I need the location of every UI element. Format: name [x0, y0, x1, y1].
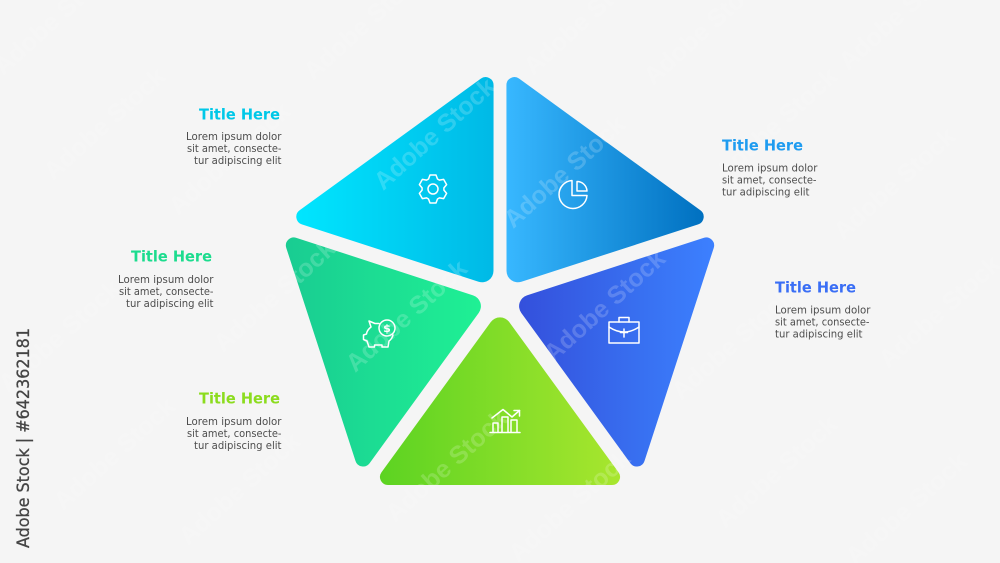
text block: royal blue: sit amet, consecte- — [775, 316, 870, 328]
stock watermarks: Adobe Stock — [164, 97, 296, 221]
segment: blue triangle — [414, 74, 707, 351]
stock watermarks: Adobe Stock — [341, 254, 473, 378]
icon: pie chart — [559, 180, 587, 208]
text block: royal blue: Lorem ipsum dolor — [775, 304, 871, 316]
text block: royal blue: tur adipiscing elit — [775, 328, 862, 340]
stock watermarks: Adobe Stock — [174, 427, 306, 551]
text block: cyan: Lorem ipsum dolor — [186, 131, 282, 143]
stock watermarks: Adobe Stock — [711, 410, 843, 534]
text block: royal blue — [775, 278, 871, 340]
text block: lime: tur adipiscing elit — [194, 440, 282, 452]
segment: cyan triangle — [293, 74, 586, 351]
segment: royal blue triangle — [483, 188, 716, 469]
stock watermarks: Adobe Stock — [369, 72, 501, 196]
stock watermarks: Adobe Stock — [499, 110, 631, 234]
stock watermarks: Adobe Stock — [381, 404, 513, 528]
stock watermarks: Adobe Stock — [39, 62, 171, 186]
stock watermarks: Adobe Stock — [711, 62, 843, 186]
icon: growth chart — [490, 410, 520, 432]
stock watermarks: Adobe Stock — [829, 122, 961, 246]
text block: cyan: tur adipiscing elit — [194, 155, 282, 167]
segment: green triangle — [284, 188, 517, 469]
text block: blue: sit amet, consecte- — [722, 174, 817, 186]
text block: cyan: sit amet, consecte- — [187, 143, 282, 155]
stock id label: Adobe Stock | #642362181 — [14, 328, 34, 548]
pentagon diagram — [284, 74, 716, 485]
text block: blue — [722, 136, 818, 198]
icon: piggy bank: $ — [383, 322, 391, 335]
segment: lime triangle — [380, 317, 620, 485]
text block: blue: Lorem ipsum dolor — [722, 162, 818, 174]
stock watermarks: Adobe Stock — [667, 282, 799, 406]
stock watermarks: Adobe Stock — [539, 244, 671, 368]
icon: gear — [419, 175, 447, 203]
text block: cyan — [186, 106, 282, 167]
text block: royal blue: Title Here — [775, 278, 856, 296]
text block: lime — [186, 390, 282, 452]
text block: blue: tur adipiscing elit — [722, 186, 810, 198]
text block: lime: Title Here — [199, 390, 280, 408]
text block: blue: Title Here — [722, 136, 803, 154]
stock watermarks: Adobe Stock — [209, 234, 341, 358]
text block: lime: Lorem ipsum dolor — [186, 416, 282, 428]
text block: cyan: Title Here — [199, 106, 280, 124]
text block: green — [118, 248, 214, 310]
text block: green: sit amet, consecte- — [119, 286, 214, 298]
icon: briefcase — [609, 318, 639, 343]
text block: green: tur adipiscing elit — [126, 298, 214, 310]
text block: green: Lorem ipsum dolor — [118, 274, 214, 286]
stock watermarks: Adobe Stock — [49, 392, 181, 516]
text block: lime: sit amet, consecte- — [187, 428, 282, 440]
icon: piggy bank — [364, 320, 395, 347]
text block: green: Title Here — [131, 248, 212, 266]
